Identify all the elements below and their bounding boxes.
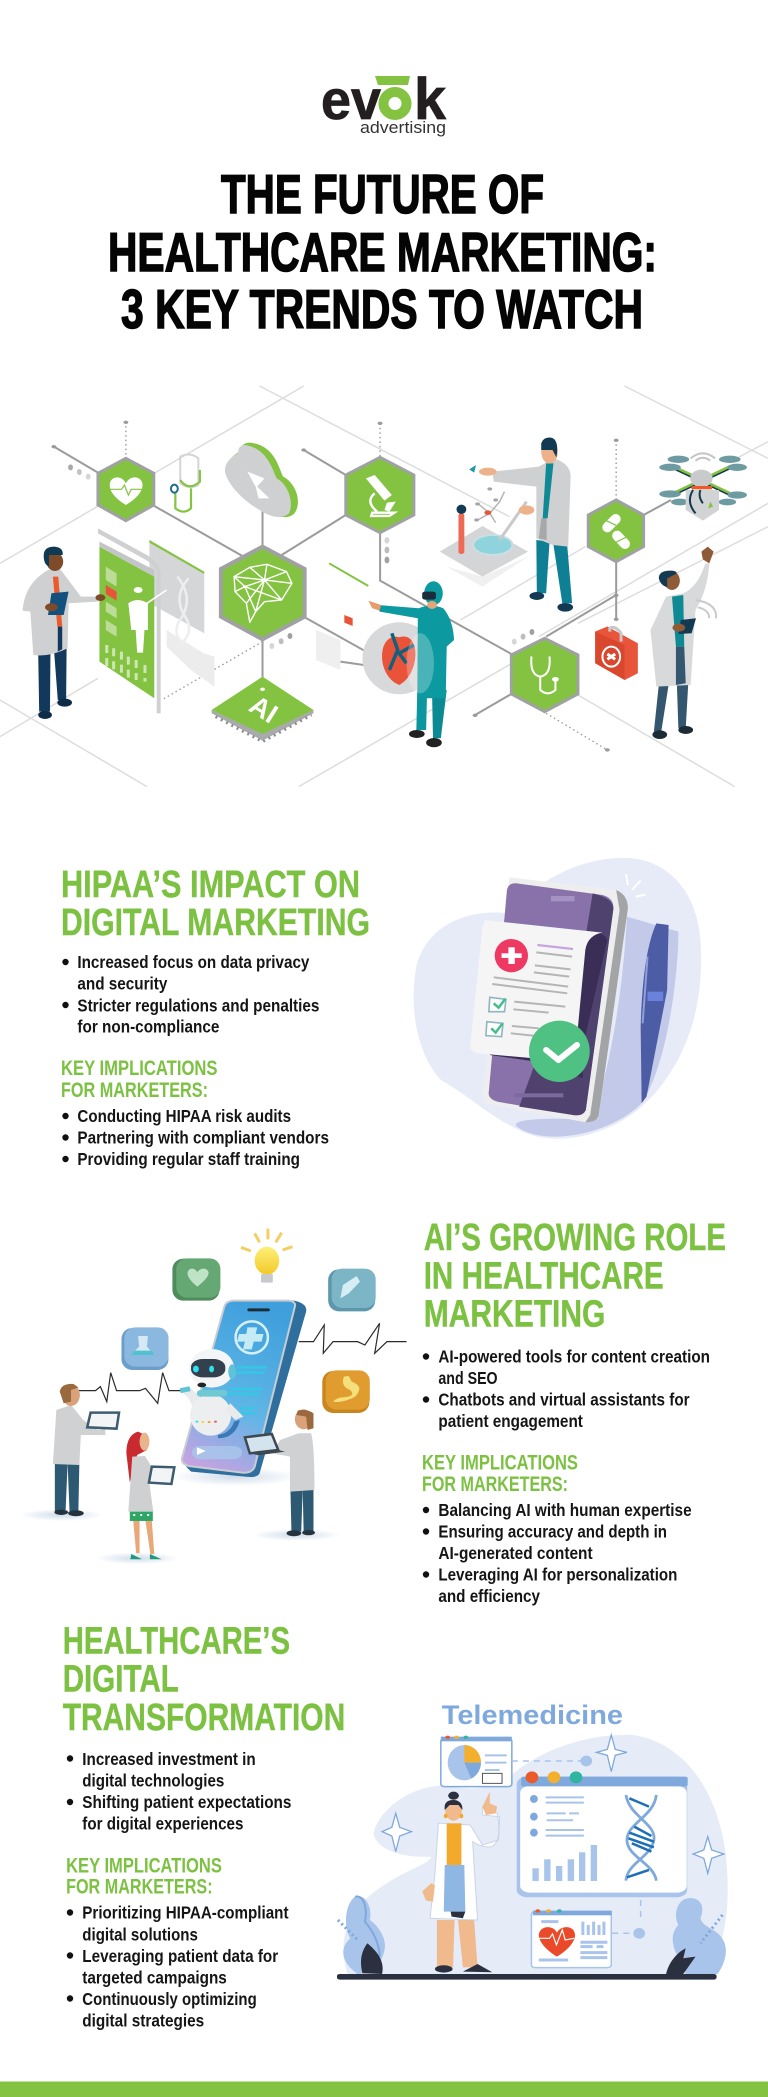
hexagon: stethoscope — [511, 638, 578, 712]
subheading: key implications: KEY IMPLICATIONS — [422, 1451, 578, 1474]
surgeon with VR headset — [368, 581, 454, 747]
heading: digital transformation — [63, 1620, 345, 1739]
subheading: key implications — [422, 1451, 578, 1496]
lightbulb — [241, 1229, 292, 1283]
heading: HIPAA's impact: DIGITAL MARKETING — [61, 902, 370, 944]
icon: cloud — [225, 443, 298, 517]
title: THE FUTURE OF — [221, 163, 544, 225]
bullet list: digital implications: Prioritizing HIPAA-compliant — [82, 1903, 289, 1923]
illustration title: Telemedicine: Telemedicine — [442, 1700, 623, 1730]
bullet list: digital trends: Increased investment in — [82, 1749, 256, 1769]
app icon: heart — [172, 1258, 220, 1301]
bullet list: digital implications: Leveraging patient data for — [82, 1946, 278, 1966]
app icon: flask — [121, 1327, 168, 1370]
app icon: syringe — [328, 1269, 376, 1311]
bullet list: HIPAA implications: Partnering with compliant vendors — [77, 1127, 329, 1147]
subheading: key implications: KEY IMPLICATIONS — [61, 1057, 218, 1080]
doctor with clipboard — [23, 547, 105, 719]
bullet list: digital implications: digital strategies — [82, 2010, 204, 2030]
subheading: key implications — [61, 1057, 218, 1102]
panel: healthcare's digital transformation — [63, 1620, 345, 2030]
medical screen — [98, 528, 215, 713]
subheading: key implications: FOR MARKETERS: — [66, 1876, 213, 1899]
bullet list: digital implications: Continuously optimizing — [82, 1989, 257, 2009]
hexagon: pills — [588, 500, 644, 562]
bullet list: HIPAA trends: Stricter regulations and penalties — [77, 995, 320, 1015]
heading: digital transformation: DIGITAL — [63, 1659, 179, 1701]
bullet list: AI implications: Ensuring accuracy and depth in — [438, 1522, 667, 1542]
heading: digital transformation: TRANSFORMATION — [63, 1697, 345, 1739]
title — [108, 163, 657, 340]
sparkles — [382, 1735, 724, 1873]
footer bar — [0, 2082, 768, 2097]
bullet list: AI trends: patient engagement — [438, 1411, 583, 1431]
heading: HIPAA's impact — [61, 864, 370, 944]
icon: stethoscope — [171, 455, 200, 512]
bullet list: AI implications — [423, 1500, 692, 1606]
panel: AI's growing role — [422, 1217, 726, 1606]
telemedicine doctor — [422, 1792, 500, 1973]
bullet list: HIPAA trends: for non-compliance — [77, 1017, 220, 1037]
bullet list: AI implications: and efficiency — [438, 1586, 540, 1606]
bullet list: digital trends: Shifting patient expectations — [82, 1792, 292, 1812]
bullet list: AI implications: Balancing AI with human expertise — [438, 1500, 692, 1520]
illustration: telemedicine doctor and screens — [337, 1735, 728, 1980]
heart with surgeon hologram — [316, 563, 436, 694]
bullet list: AI implications: Leveraging AI for personalization — [438, 1565, 677, 1585]
logo: evok advertising: ev — [321, 68, 381, 131]
floor line — [337, 1974, 717, 1980]
bullet list: digital trends — [67, 1749, 292, 1834]
doctor with tablet, left — [53, 1384, 119, 1516]
app icon: stomach — [322, 1370, 370, 1413]
bullet list: HIPAA trends: and security — [77, 974, 168, 994]
bullet list: HIPAA trends — [62, 952, 320, 1037]
bullet list: AI trends — [423, 1347, 710, 1431]
bullet list: HIPAA implications: Providing regular staff training — [77, 1149, 300, 1169]
hexagon: heart rate — [98, 458, 154, 521]
heading: digital transformation: HEALTHCARE’S — [63, 1620, 290, 1662]
chip label: AI: AI — [244, 690, 283, 729]
bullet list: digital trends: digital technologies — [82, 1771, 225, 1791]
bullet list: digital implications: digital solutions — [82, 1924, 198, 1944]
heading: HIPAA's impact: HIPAA’S IMPACT ON — [61, 864, 360, 906]
logo: evok advertising: k — [414, 67, 447, 132]
doctor with laptop, right — [245, 1409, 315, 1536]
background grid lines — [0, 386, 768, 787]
hero illustration: digital healthcare network — [0, 386, 768, 787]
hexagon: microscope — [346, 457, 414, 533]
logo: evok advertising — [321, 67, 447, 137]
bullet list: AI implications: AI-generated content — [438, 1543, 593, 1563]
subheading: key implications: FOR MARKETERS: — [422, 1473, 568, 1496]
illustration: AI robot, phone and doctors — [20, 1229, 407, 1564]
lab plate, test tube and molecule — [440, 465, 528, 587]
phone — [182, 1301, 306, 1477]
heading: AI's growing role — [424, 1217, 726, 1336]
subheading: key implications: KEY IMPLICATIONS — [66, 1854, 222, 1877]
robot — [180, 1349, 243, 1438]
bullet list: AI trends: and SEO — [438, 1368, 498, 1388]
bullet list: HIPAA implications: Conducting HIPAA risk audits — [77, 1106, 291, 1126]
bullet list: HIPAA trends: Increased focus on data privacy — [77, 952, 310, 972]
bullet list: digital trends: for digital experiences — [82, 1814, 244, 1834]
connector lines — [51, 421, 671, 752]
bullet list: digital implications: targeted campaigns — [82, 1967, 227, 1987]
woman with tablet — [126, 1432, 174, 1559]
first aid kit — [595, 627, 638, 680]
background blob — [344, 1735, 728, 1975]
bullet list: HIPAA implications — [62, 1106, 329, 1169]
ECG lines — [78, 1323, 407, 1403]
floor shadows — [20, 1467, 340, 1564]
hexagon: brain network — [221, 547, 305, 639]
logo: evok advertising: advertising — [360, 118, 446, 137]
doctor reaching up — [650, 547, 716, 739]
heart monitor window — [531, 1900, 645, 1968]
chart window — [441, 1736, 592, 1787]
heading: AI's growing role: IN HEALTHCARE — [424, 1255, 664, 1297]
panel: HIPAA's impact — [61, 864, 370, 1169]
subheading: key implications: FOR MARKETERS: — [61, 1079, 208, 1102]
drone — [659, 453, 747, 521]
heading: AI's growing role: MARKETING — [424, 1294, 605, 1336]
scientist in lab coat — [479, 438, 573, 612]
bullet list: AI trends: AI-powered tools for content creation — [438, 1347, 710, 1367]
bullet list: digital implications — [67, 1903, 289, 2030]
bullet list: AI trends: Chatbots and virtual assistants for — [438, 1389, 690, 1409]
AI chip — [212, 677, 313, 742]
plants — [338, 1896, 726, 1974]
illustration: phone with medical record — [414, 858, 701, 1139]
subheading: key implications — [66, 1854, 222, 1899]
DNA dashboard window — [517, 1771, 688, 1897]
